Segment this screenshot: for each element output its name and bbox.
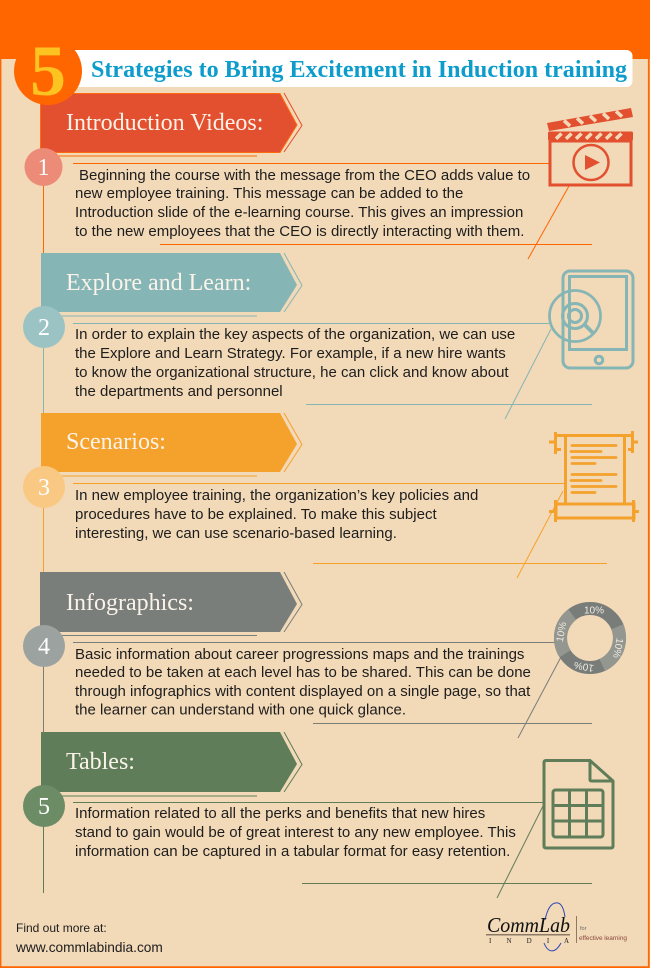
text block 2: the Explore and Learn Strategy. For example, if a new hire wants xyxy=(75,345,506,362)
icon: clapperboard xyxy=(547,108,633,185)
text block 4: through infographics with content displayed on a single page, so that xyxy=(75,683,531,700)
banner: Scenarios: Scenarios: xyxy=(66,429,166,455)
number 4 xyxy=(23,625,65,667)
number 1: 1 xyxy=(38,155,50,181)
logo: CommLab India: for xyxy=(580,926,587,932)
footer link: www.commlabindia.com xyxy=(15,940,163,955)
number 5 xyxy=(23,785,65,827)
banner: Explore and Learn xyxy=(41,253,302,316)
title badge 5: 5 xyxy=(30,31,66,111)
number 3 xyxy=(23,466,65,508)
text block 2: the departments and personnel xyxy=(75,383,283,400)
text block 2: to know the organizational structure, he can click and know about xyxy=(75,364,509,381)
banner: Infographics: Infographics: xyxy=(66,590,194,616)
text block 4: needed to be taken at each level has to be shared. This can be done xyxy=(75,664,531,681)
banner: Introduction Videos: Introduction Videos: xyxy=(66,110,263,136)
banner: Introduction Videos xyxy=(40,93,302,156)
text block 3: procedures have to be explained. To make this subject xyxy=(75,506,437,523)
banner: Scenarios xyxy=(41,413,302,476)
number 2 xyxy=(23,306,65,348)
text block 5: stand to gain would be of great interest to any new employee. This xyxy=(75,824,516,841)
text block 1 xyxy=(73,164,592,259)
timeline xyxy=(42,180,44,253)
logo: CommLab India: I N D I A xyxy=(489,937,569,945)
text block 1: new employee training. This message can be added to the xyxy=(75,185,463,202)
icon: spreadsheet file xyxy=(544,760,613,848)
icon: donut chart: 10% xyxy=(584,606,604,616)
text block 5 xyxy=(73,802,592,898)
banner: Explore and Learn: Explore and Learn: xyxy=(66,270,251,296)
section 2 xyxy=(23,253,633,419)
logo: CommLab India xyxy=(486,903,627,951)
icon: donut chart xyxy=(554,606,626,673)
icon: tablet with magnifier xyxy=(550,271,633,368)
number 1 xyxy=(24,148,62,186)
text block 2: In order to explain the key aspects of the organization, we can use xyxy=(75,326,515,343)
number 2: 2 xyxy=(38,315,50,341)
number 4: 4 xyxy=(38,634,50,660)
footer link xyxy=(15,921,163,955)
text block 1: to the new employees that the CEO is directly interacting with them. xyxy=(75,223,524,240)
icon: donut chart: 10% xyxy=(573,659,595,673)
text block 4: Basic information about career progressions maps and the trainings xyxy=(75,646,524,663)
section 5 xyxy=(23,732,613,898)
section 1 xyxy=(14,31,633,259)
text block 1: Beginning the course with the message from the CEO adds value to xyxy=(79,167,530,184)
section 4 xyxy=(23,572,626,738)
text block 1: Introduction slide of the e-learning course. This gives an impression xyxy=(75,204,523,221)
title banner: Strategies to Bring Excitement in Induction training xyxy=(91,57,627,83)
banner: Infographics xyxy=(40,572,302,636)
banner: Tables xyxy=(41,732,302,796)
header band xyxy=(0,0,650,59)
text block 3 xyxy=(73,484,607,578)
banner: Tables: Tables: xyxy=(66,749,135,775)
text block 3: In new employee training, the organization’s key policies and xyxy=(75,487,478,504)
text block 5: Information related to all the perks and benefits that new hires xyxy=(75,805,485,822)
logo: CommLab India: effective learning xyxy=(579,935,627,942)
icon: donut chart: 10% xyxy=(610,637,625,659)
title badge 5 xyxy=(14,31,82,111)
number 3: 3 xyxy=(38,475,50,501)
section 3 xyxy=(23,413,639,578)
icon: donut chart: 10% xyxy=(555,621,569,643)
logo: CommLab India: CommLab xyxy=(487,913,570,937)
text block 3: interesting, we can use scenario-based learning. xyxy=(75,525,397,542)
footer link: Find out more at: xyxy=(16,921,107,935)
number 5: 5 xyxy=(38,794,50,820)
text block 5: information can be captured in a tabular format for easy retention. xyxy=(75,843,510,860)
icon: scroll xyxy=(549,431,639,522)
text block 2 xyxy=(73,324,592,419)
text block 4: the learner can understand with one quick glance. xyxy=(75,702,406,718)
text block 4 xyxy=(73,642,592,738)
title banner xyxy=(60,50,632,87)
